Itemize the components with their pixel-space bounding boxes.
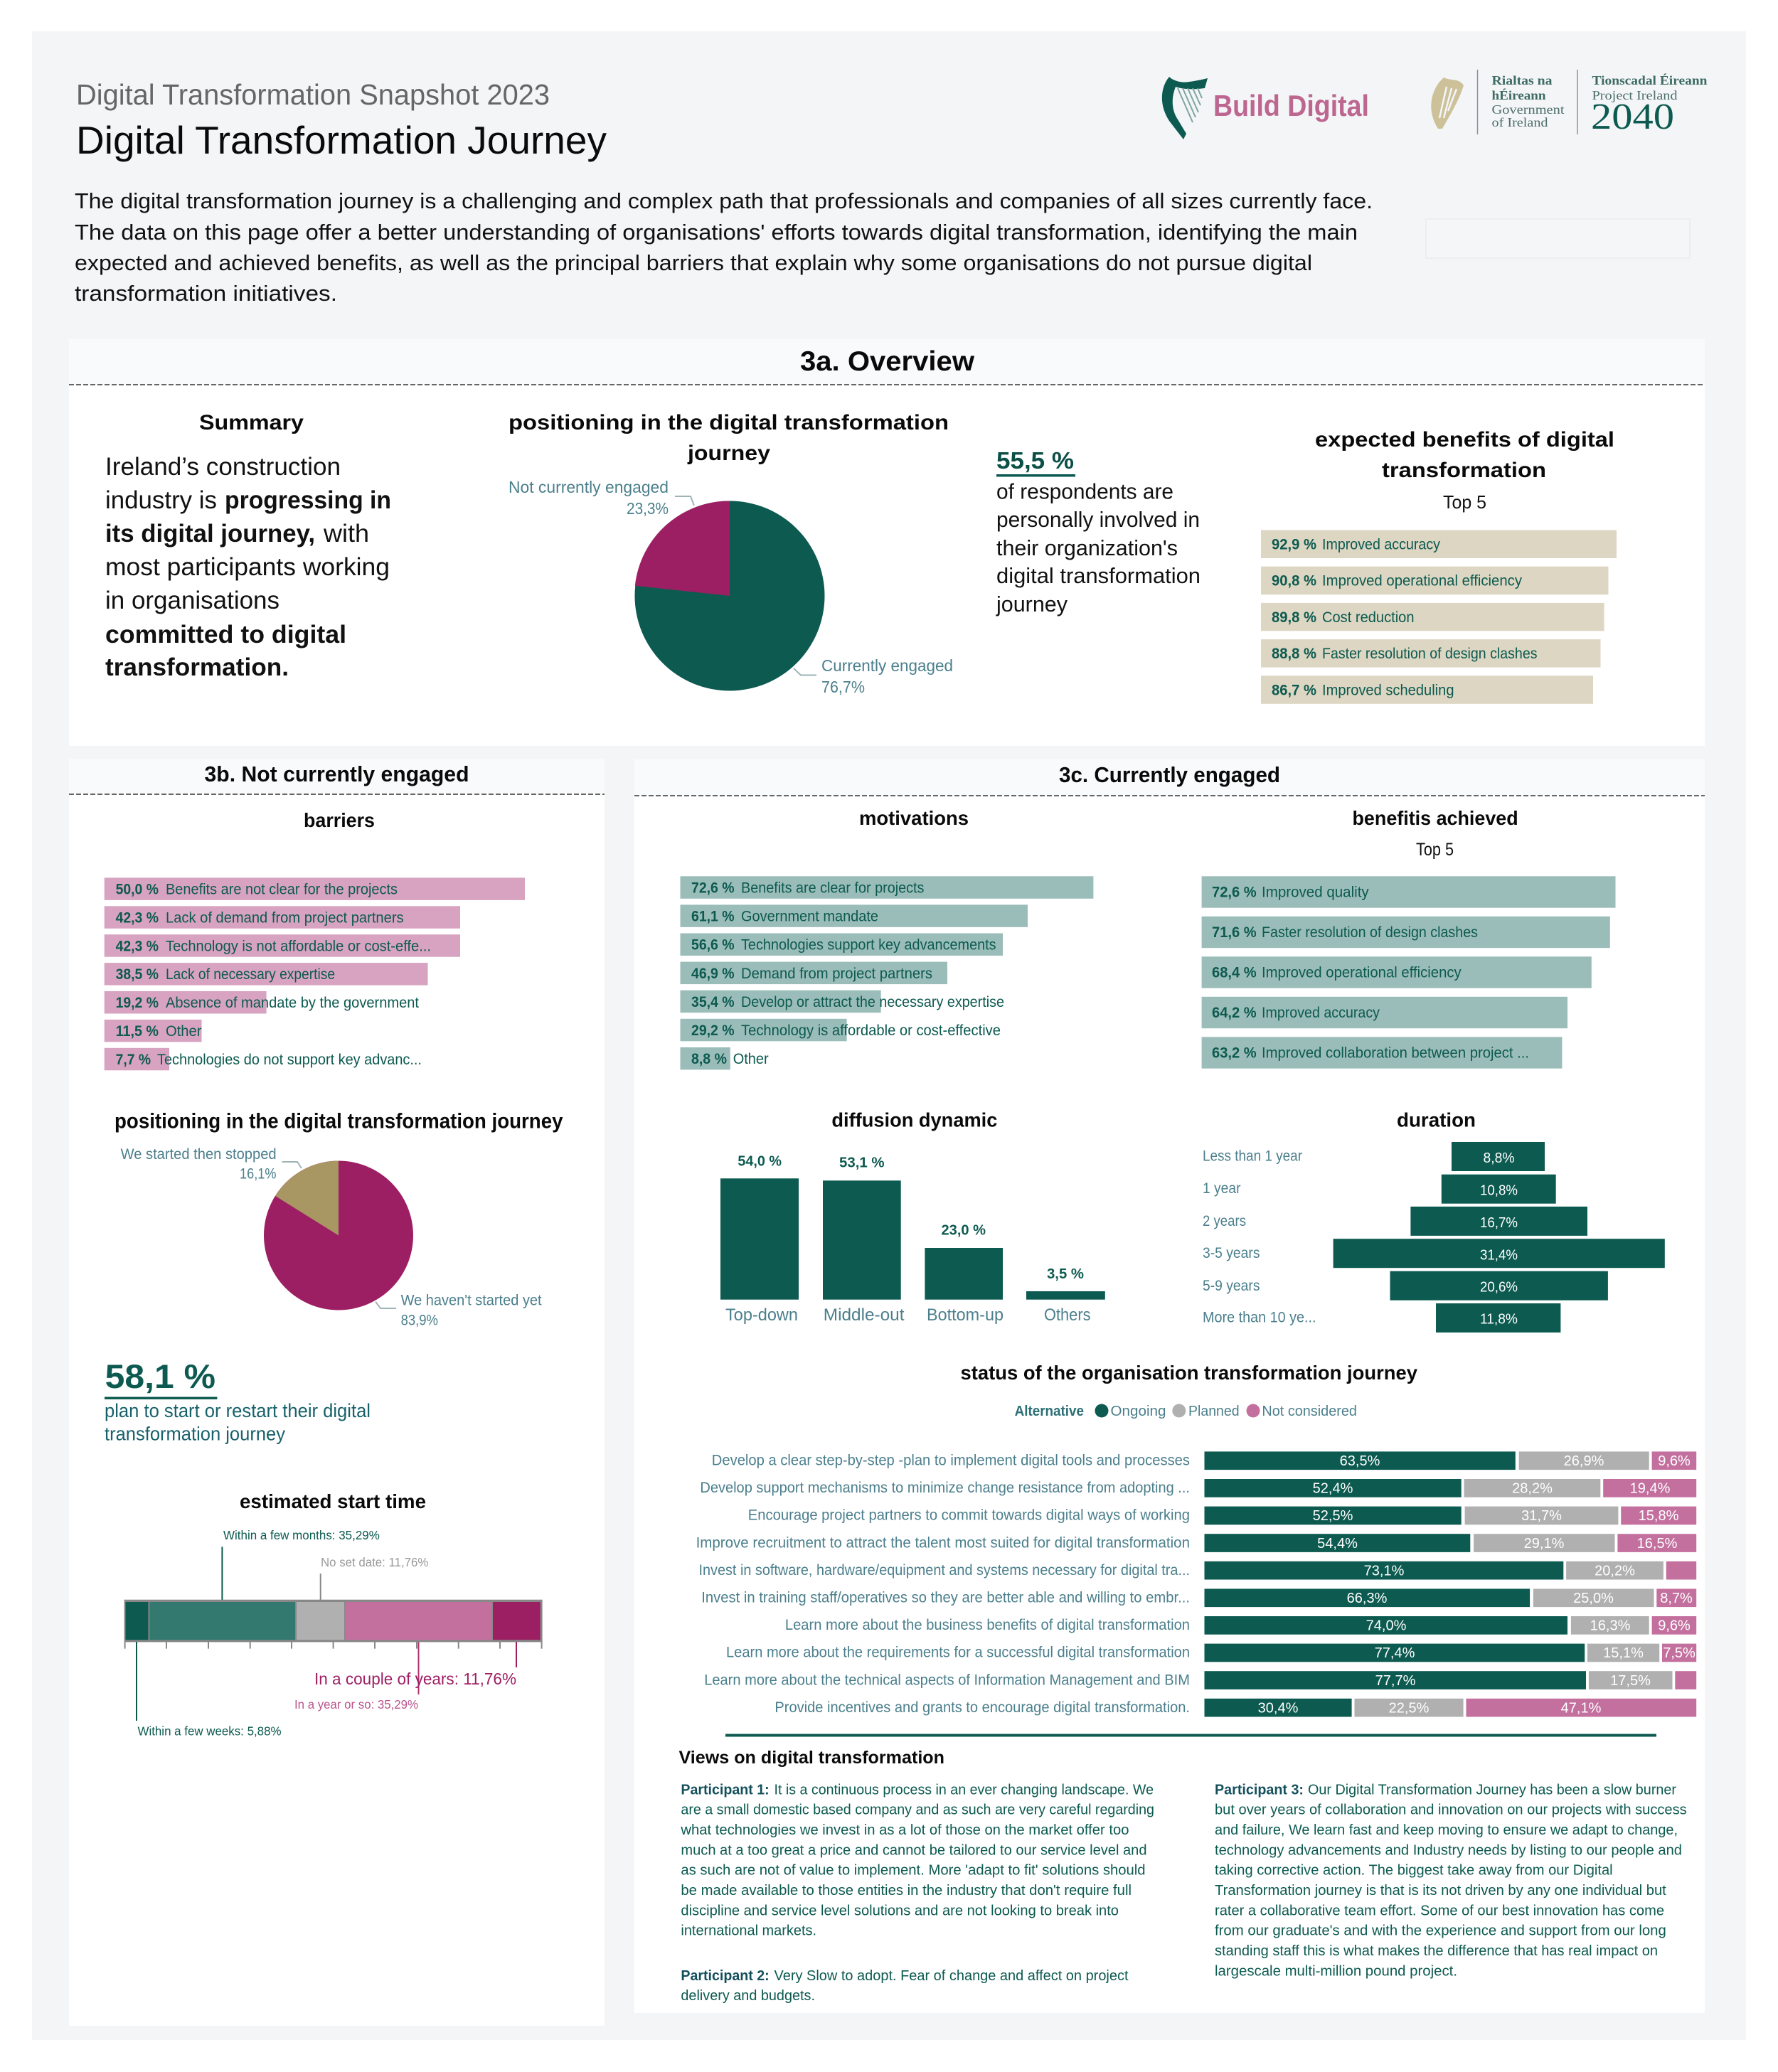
column chart: diffusion dynamic: Bottom-up [927, 1305, 1004, 1325]
summary text block: committed to digital [105, 621, 346, 648]
intro paragraph: The data on this page offer a better understanding of organisations' efforts towards digital transformation, identifying the main [75, 220, 1358, 245]
segment values: 9,6% [1658, 1453, 1691, 1469]
funnel chart: duration: 10,8% [1480, 1183, 1518, 1199]
legend: Not considered [1262, 1404, 1357, 1419]
funnel chart: duration: 5-9 years [1203, 1278, 1260, 1294]
intro paragraph: The digital transformation journey is a challenging and complex path that professionals and companies of all sizes currently face. [75, 188, 1373, 213]
summary text block [105, 411, 391, 681]
bar chart: barriers: Benefits are not clear for the projects [166, 882, 398, 897]
stat callout: 55,5 %: journey [996, 592, 1068, 616]
bar chart: motivations: Technologies support key advancements [741, 937, 996, 954]
bar chart: barriers: 19,2 % [116, 995, 159, 1011]
segment values: 19,4% [1630, 1481, 1671, 1497]
funnel chart: duration: 16,7% [1480, 1215, 1518, 1231]
summary text block: industry is [105, 486, 217, 514]
stat callout: 58,1 % [105, 1357, 371, 1444]
logo: Build Digital: Build Digital [1213, 89, 1369, 122]
stacked bar: estimated start time: Within a few weeks: 5,88% [138, 1724, 282, 1739]
not considered segments [1466, 1451, 1696, 1716]
bar chart: motivations: Demand from project partners [741, 966, 932, 982]
panel: 3b not currently engaged [69, 759, 605, 2026]
participant 3: taking corrective action. The biggest take away from our Digital [1215, 1863, 1613, 1879]
pie chart: positioning in the digital transformation journey: positioning in the digital transformation [509, 411, 949, 434]
stacked bar: estimated start time: estimated start time [240, 1490, 426, 1512]
bar chart: motivations: 46,9 % [691, 966, 735, 982]
summary text block: Ireland’s construction [105, 453, 341, 481]
logo: Government of Ireland and Project Ireland 2040 [1431, 70, 1707, 137]
segment values: 31,7% [1521, 1508, 1562, 1524]
funnel chart: duration: 1 year [1203, 1180, 1240, 1197]
column chart: diffusion dynamic: diffusion dynamic [831, 1109, 997, 1131]
participant 3: largescale multi-million pound project. [1215, 1963, 1457, 1979]
bar chart: expected benefits [1261, 428, 1617, 704]
stat callout: 55,5 %: personally involved in [996, 507, 1200, 532]
segment values: 29,1% [1524, 1536, 1565, 1552]
segment values: 20,2% [1595, 1563, 1635, 1579]
pie chart: positioning among not engaged: 16,1% [240, 1165, 276, 1182]
stacked bar chart: status of the organisation transformation journey [696, 1362, 1696, 1716]
funnel chart: duration: 31,4% [1480, 1247, 1518, 1263]
segment values: 26,9% [1564, 1453, 1604, 1469]
logo: Government of Ireland and Project Ireland 2040: of Ireland [1492, 115, 1548, 129]
logo: Government of Ireland and Project Ireland 2040: Tionscadal Éireann [1592, 73, 1707, 87]
intro paragraph: expected and achieved benefits, as well as the principal barriers that explain why some organisations do not pursue digital [75, 250, 1312, 275]
pie chart: positioning among not engaged: positioning in the digital transformation journey [115, 1109, 563, 1133]
pie chart: positioning in the digital transformation journey: journey [687, 442, 770, 465]
bar chart: motivations: motivations [859, 807, 969, 829]
bar chart: expected benefits: Top 5 [1443, 491, 1486, 513]
segment values: 7,5% [1663, 1645, 1696, 1661]
row labels [696, 1452, 1190, 1716]
logo: Government of Ireland and Project Ireland 2040: Project Ireland [1592, 88, 1677, 102]
bar chart: barriers: Lack of demand from project partners [166, 909, 404, 926]
summary text block: its digital journey, [105, 520, 315, 548]
bar chart: motivations: 35,4 % [691, 994, 735, 1010]
column chart: diffusion dynamic: 23,0 % [942, 1223, 986, 1239]
participant 1: what technologies we invest in as a lot of those on the market offer too [680, 1822, 1129, 1838]
participant 3: Participant 3: [1215, 1782, 1304, 1798]
quotes: views on digital transformation: Views on digital transformation [678, 1748, 944, 1768]
column chart: diffusion dynamic: 3,5 % [1047, 1266, 1084, 1282]
segment values: 52,4% [1313, 1481, 1353, 1497]
pie chart: positioning among not engaged: 83,9% [401, 1311, 438, 1328]
title: Digital Transformation Journey [76, 118, 607, 162]
bar chart: benefits achieved: Improved accuracy [1262, 1005, 1380, 1021]
bar chart: expected benefits: Improved operational efficiency [1322, 573, 1522, 589]
bar chart: expected benefits: 92,9 % [1272, 536, 1316, 553]
segment values: 15,8% [1639, 1508, 1679, 1524]
segment values: 8,7% [1660, 1591, 1693, 1606]
bar chart: expected benefits: expected benefits of digital [1315, 428, 1614, 452]
row labels: Invest in software, hardware/equipment and systems necessary for digital tra... [698, 1562, 1190, 1579]
segment values: 25,0% [1573, 1591, 1614, 1606]
segment values: 74,0% [1366, 1618, 1407, 1634]
segment values: 16,5% [1637, 1536, 1678, 1552]
logo: Government of Ireland and Project Ireland 2040: Rialtas na [1492, 73, 1552, 87]
bar chart: barriers: 42,3 % [116, 938, 159, 954]
bar chart: motivations: 56,6 % [691, 937, 735, 954]
stat callout: 58,1 %: transformation journey [105, 1423, 285, 1444]
participant 1: It is a continuous process in an ever changing landscape. We [774, 1782, 1154, 1798]
bar chart: benefits achieved: 71,6 % [1212, 924, 1257, 941]
pie chart: positioning among not engaged: We started then stopped [121, 1146, 277, 1163]
pie chart: positioning among not engaged: We haven't started yet [401, 1291, 542, 1308]
bar chart: expected benefits: 90,8 % [1272, 573, 1316, 589]
bar chart: benefits achieved: Top 5 [1416, 840, 1454, 860]
summary text block: transformation. [105, 653, 289, 681]
segment values: 54,4% [1317, 1536, 1358, 1552]
logo: Government of Ireland and Project Ireland 2040: hÉireann [1492, 87, 1546, 102]
bar chart: expected benefits: 88,8 % [1272, 646, 1316, 662]
row labels: Develop a clear step-by-step -plan to implement digital tools and processes [712, 1452, 1190, 1469]
stat callout: 55,5 % [996, 447, 1201, 616]
legend [1015, 1404, 1357, 1419]
participant 1: are a small domestic based company and as such are very careful regarding [681, 1803, 1154, 1818]
bar chart: benefits achieved: Faster resolution of design clashes [1262, 924, 1478, 941]
bar chart: motivations: 8,8 % [691, 1051, 727, 1067]
row labels: Develop support mechanisms to minimize change resistance from adopting ... [700, 1480, 1190, 1496]
bar chart: expected benefits: Faster resolution of design clashes [1322, 646, 1538, 662]
stacked bar: estimated start time: In a couple of years: 11,76% [314, 1670, 516, 1688]
column chart: diffusion dynamic: Top-down [725, 1305, 798, 1325]
bar chart: motivations: 72,6 % [691, 880, 735, 896]
header block [75, 70, 1707, 306]
bar chart: benefits achieved: Improved operational efficiency [1262, 965, 1462, 981]
bar chart: barriers [105, 809, 525, 1070]
intro paragraph: transformation initiatives. [75, 281, 337, 306]
bar chart: expected benefits: Cost reduction [1322, 609, 1414, 626]
segment values: 16,3% [1590, 1618, 1631, 1634]
segment values: 73,1% [1364, 1563, 1405, 1579]
bar chart: benefits achieved [1202, 807, 1616, 1069]
participant 3: Transformation journey is that is its not driven by any one individual but [1215, 1883, 1666, 1899]
bar chart: expected benefits: Improved scheduling [1322, 682, 1454, 698]
heading: 3b: 3b. Not currently engaged [205, 762, 469, 786]
bar chart: expected benefits: transformation [1382, 459, 1546, 482]
segment values: 17,5% [1610, 1673, 1651, 1689]
stacked bar: estimated start time: Within a few months: 35,29% [223, 1528, 380, 1542]
pie chart: positioning in the digital transformation journey: 76,7% [821, 678, 865, 696]
stat callout: 58,1 %: plan to start or restart their digital [105, 1400, 371, 1421]
participant 1: much at a too great a price and cannot be tailored to our service level and [681, 1842, 1146, 1858]
ongoing segments [1205, 1451, 1586, 1716]
stat callout: 58,1 %: 58,1 % [105, 1357, 215, 1395]
segment values: 22,5% [1389, 1700, 1430, 1716]
summary text block: Summary [199, 411, 304, 434]
planned segments [1354, 1451, 1673, 1716]
bar chart: barriers: Technologies do not support key advanc... [157, 1052, 422, 1068]
bar chart: motivations: Government mandate [741, 909, 878, 925]
column chart: diffusion dynamic: 53,1 % [839, 1155, 885, 1171]
bar chart: benefits achieved: 64,2 % [1212, 1005, 1257, 1021]
stat callout: 55,5 %: 55,5 % [996, 447, 1074, 474]
bar chart: barriers: 50,0 % [116, 882, 159, 897]
row labels: Learn more about the business benefits of digital transformation [785, 1617, 1190, 1633]
funnel chart: duration: 8,8% [1484, 1150, 1515, 1166]
summary text block: in organisations [105, 587, 280, 614]
funnel chart: duration [1203, 1109, 1665, 1333]
bar chart: barriers: 38,5 % [116, 966, 159, 983]
bar chart: motivations: Develop or attract the necessary expertise [741, 994, 1004, 1010]
bar chart: benefits achieved: 72,6 % [1212, 885, 1257, 901]
column chart: diffusion dynamic: Others [1044, 1305, 1091, 1325]
summary text block: most participants working [105, 553, 390, 581]
participant 1: as such are not of value to implement. More 'adapt to fit' solutions should [681, 1863, 1146, 1879]
bar chart: barriers: barriers [304, 809, 375, 831]
legend: Planned [1188, 1404, 1240, 1419]
participant 1: Participant 1: [681, 1782, 770, 1798]
participant 3: from our graduate's and with the experience and support from our long [1215, 1923, 1666, 1939]
bar chart: motivations: Technology is affordable or cost-effective [741, 1022, 1001, 1039]
quotes: views on digital transformation [678, 1748, 1687, 2004]
bar chart: benefits achieved: 68,4 % [1212, 965, 1257, 981]
stacked bar: estimated start time [124, 1490, 543, 1739]
legend: Alternative [1015, 1404, 1084, 1419]
pie chart: positioning among not engaged [115, 1109, 563, 1328]
stacked bar: estimated start time: In a year or so: 35,29% [294, 1697, 418, 1711]
pie chart: positioning in the digital transformation journey: Not currently engaged [509, 478, 669, 496]
pie chart: positioning in the digital transformation journey: Currently engaged [821, 656, 953, 675]
stacked bar: estimated start time: No set date: 11,76% [321, 1555, 428, 1569]
bar chart: benefits achieved: Improved collaboration between project ... [1262, 1045, 1529, 1062]
logo: Government of Ireland and Project Ireland 2040: Government [1492, 102, 1565, 117]
logo: Government of Ireland and Project Ireland 2040: 2040 [1591, 97, 1674, 137]
bar chart: expected benefits: Improved accuracy [1322, 536, 1440, 553]
row labels: Invest in training staff/operatives so they are better able and willing to embr... [701, 1590, 1190, 1606]
bar chart: motivations: Other [733, 1051, 769, 1067]
bar chart: benefits achieved: Improved quality [1262, 885, 1369, 901]
bar chart: motivations: Benefits are clear for projects [741, 880, 924, 896]
intro paragraph [75, 188, 1373, 306]
bar chart: barriers: 11,5 % [116, 1023, 159, 1040]
bar chart: barriers: Lack of necessary expertise [166, 966, 335, 983]
bar chart: motivations [680, 807, 1093, 1069]
participant 1: be made available to those entities in the industry that don't require full [681, 1883, 1132, 1899]
summary text block: progressing in [225, 486, 391, 514]
logo: Build Digital [1162, 77, 1369, 139]
bar chart: barriers: Other [166, 1023, 202, 1040]
pie chart: positioning in the digital transformation journey: 23,3% [627, 499, 669, 518]
stat callout: 55,5 %: digital transformation [996, 563, 1201, 588]
segment values: 28,2% [1512, 1481, 1553, 1497]
segment values: 30,4% [1258, 1700, 1299, 1716]
bar chart: expected benefits: 86,7 % [1272, 682, 1316, 698]
divider rule [725, 1734, 1656, 1736]
stacked bar chart: status of the organisation transformation journey: status of the organisation transformation journey [960, 1362, 1417, 1384]
participant 2: delivery and budgets. [681, 1988, 815, 2004]
bar chart: motivations: 29,2 % [691, 1022, 735, 1039]
segment values [1258, 1453, 1696, 1716]
participant 3: rater a collaborative team effort. Some of our best innovation has come [1215, 1903, 1664, 1918]
segment values: 9,6% [1658, 1618, 1691, 1634]
row labels: Improve recruitment to attract the talent most suited for digital transformation [696, 1534, 1190, 1551]
participant 2: Participant 2: [681, 1968, 770, 1984]
heading: 3a overview: 3a. Overview [800, 346, 975, 377]
stat callout: 55,5 %: of respondents are [996, 479, 1173, 503]
participant 3: technology advancements and Industry needs by listing to our people and [1215, 1842, 1682, 1858]
bar chart: barriers: 7,7 % [116, 1052, 151, 1068]
row labels: Learn more about the requirements for a successful digital transformation [726, 1645, 1190, 1661]
segment values: 47,1% [1561, 1700, 1602, 1716]
panel: 3a overview [69, 339, 1705, 746]
bar chart: barriers: Absence of mandate by the government [166, 995, 419, 1011]
participant 3: standing staff this is what makes the difference that has real impact on [1215, 1943, 1658, 1959]
segment values: 52,5% [1313, 1508, 1353, 1524]
heading: 3c: 3c. Currently engaged [1059, 762, 1280, 787]
column chart: diffusion dynamic [720, 1109, 1105, 1325]
pie chart: positioning in the digital transformation journey [509, 411, 953, 696]
participant 2 [681, 1968, 1129, 2004]
segment values: 63,5% [1340, 1453, 1380, 1469]
funnel chart: duration: 11,8% [1480, 1311, 1518, 1327]
subtitle: Digital Transformation Snapshot 2023 [76, 78, 550, 111]
bar chart: motivations: 61,1 % [691, 909, 735, 925]
bar chart: barriers: Technology is not affordable or cost-effe... [166, 938, 431, 954]
segment values: 15,1% [1603, 1645, 1644, 1661]
participant 3: Our Digital Transformation Journey has been a slow burner [1308, 1782, 1676, 1798]
participant 3: and failure, We learn fast and keep moving to ensure we adapt to change, [1215, 1822, 1678, 1838]
segment values: 66,3% [1347, 1591, 1388, 1606]
participant 3 [1215, 1782, 1687, 1979]
bar chart: benefits achieved: 63,2 % [1212, 1045, 1257, 1062]
funnel chart: duration: More than 10 ye... [1203, 1310, 1316, 1325]
stat callout: 55,5 %: their organization's [996, 535, 1178, 560]
panel: 3c currently engaged [634, 759, 1705, 2013]
funnel chart: duration: 20,6% [1480, 1280, 1518, 1296]
participant 1: discipline and service level solutions and are not looking to break into [681, 1903, 1119, 1918]
funnel chart: duration: duration [1397, 1109, 1476, 1131]
column chart: diffusion dynamic: 54,0 % [738, 1153, 782, 1169]
bar chart: expected benefits: 89,8 % [1272, 609, 1316, 626]
funnel chart: duration: 3-5 years [1203, 1245, 1260, 1261]
funnel chart: duration: 2 years [1203, 1213, 1246, 1229]
participant 1 [680, 1782, 1154, 1939]
row labels: Encourage project partners to commit towards digital ways of working [748, 1507, 1190, 1524]
bar chart: barriers: 42,3 % [116, 909, 159, 926]
participant 1: international markets. [681, 1923, 816, 1939]
row labels: Learn more about the technical aspects of Information Management and BIM [704, 1672, 1190, 1688]
bar chart: benefits achieved: benefitis achieved [1353, 807, 1518, 829]
segment values: 77,4% [1375, 1645, 1415, 1661]
segment values: 77,7% [1375, 1673, 1416, 1689]
legend: Ongoing [1111, 1404, 1166, 1419]
column chart: diffusion dynamic: Middle-out [824, 1305, 905, 1325]
summary text block: with [323, 520, 369, 548]
participant 2: Very Slow to adopt. Fear of change and affect on project [774, 1968, 1129, 1984]
participant 3: but over years of collaboration and innovation on our projects with success [1215, 1803, 1687, 1818]
empty outlined box [1426, 219, 1690, 258]
funnel chart: duration: Less than 1 year [1203, 1148, 1302, 1165]
row labels: Provide incentives and grants to encourage digital transformation. [774, 1699, 1190, 1716]
